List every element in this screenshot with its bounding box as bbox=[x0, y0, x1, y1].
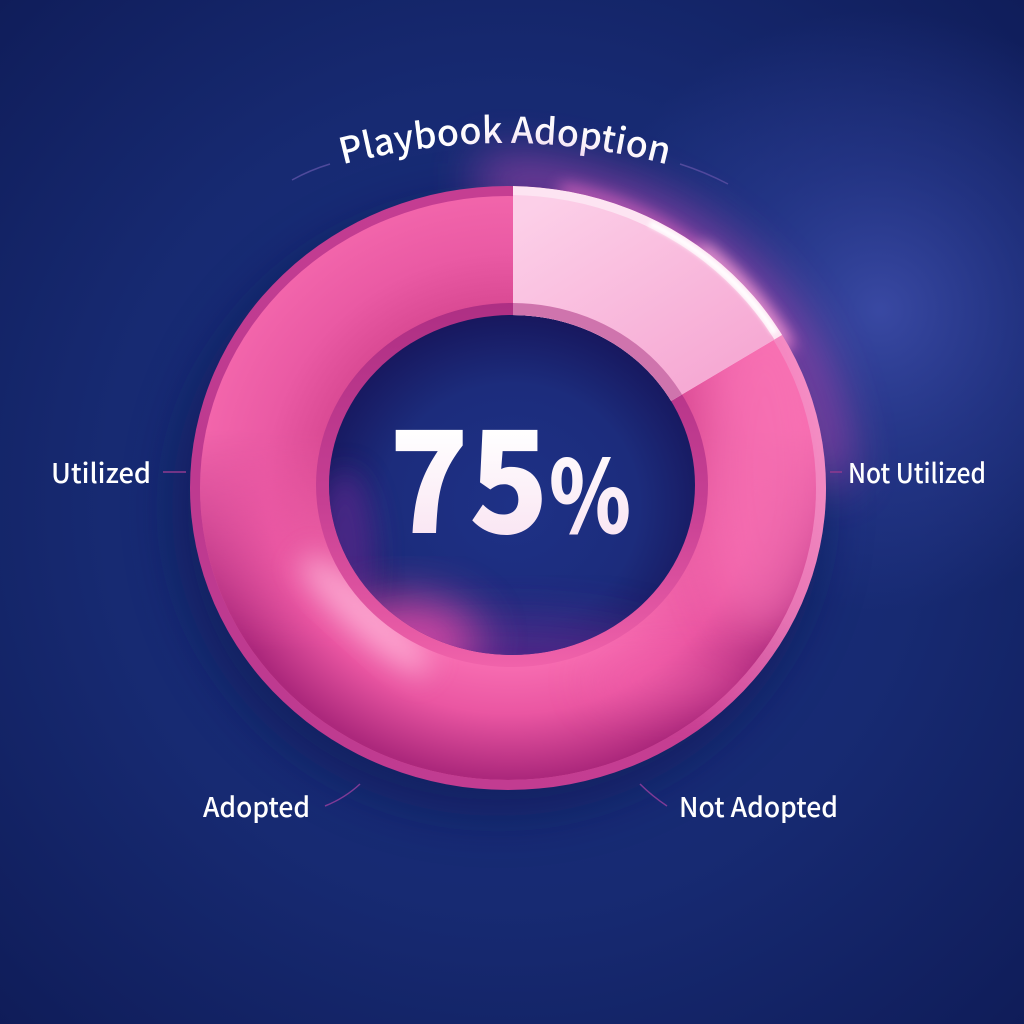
upper right wide glow bbox=[480, 180, 830, 480]
label: Not Adopted: Not Adopted bbox=[679, 786, 838, 825]
ring shadow bbox=[172, 200, 824, 816]
white rim highlight bbox=[650, 223, 775, 333]
title: Playbook Adoption bbox=[340, 114, 668, 164]
donut chart bbox=[172, 180, 830, 816]
segment: light pink (not utilized) bbox=[513, 186, 782, 401]
upper right hot glow bbox=[700, 248, 783, 345]
light segment body bbox=[513, 195, 774, 401]
light segment bevel bbox=[513, 303, 682, 401]
center hole bbox=[329, 315, 695, 655]
title bbox=[292, 114, 728, 184]
center value: 75 bbox=[389, 368, 549, 574]
label: Utilized: Utilized bbox=[51, 452, 151, 491]
inner bevel bbox=[316, 303, 708, 667]
light segment rim bbox=[513, 186, 782, 401]
label: Adopted: Adopted bbox=[203, 786, 310, 825]
label: Not Utilized: Not Utilized bbox=[848, 452, 986, 491]
center value: % bbox=[549, 417, 631, 562]
label: Adopted bbox=[203, 784, 360, 825]
ring lighting bbox=[288, 300, 830, 710]
ring body bbox=[200, 196, 816, 780]
hole inner glow bbox=[329, 464, 634, 655]
outer rim bbox=[190, 186, 826, 790]
upper right near glow bbox=[560, 190, 790, 350]
